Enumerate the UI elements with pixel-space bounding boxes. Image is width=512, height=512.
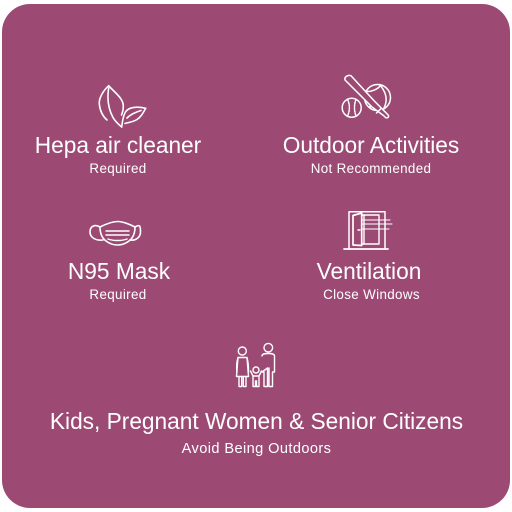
text: Not Recommended: Not Recommended: [311, 161, 431, 176]
heading: Ventilation: Ventilation: [317, 258, 421, 284]
icon: face mask: [90, 222, 140, 245]
heading: Hepa air cleaner: Hepa air cleaner: [35, 132, 202, 158]
icon: bat and balls: [342, 75, 390, 118]
heading: N95 Mask: N95 Mask: [68, 258, 171, 284]
icon: open window: [344, 212, 392, 249]
icon: leaves: [99, 86, 146, 127]
icon: family: [236, 343, 274, 386]
text: Close Windows: Close Windows: [323, 287, 420, 302]
heading: Kids, Pregnant Women & Senior Citizens: Kids, Pregnant Women & Senior Citizens: [50, 408, 463, 434]
text: Required: Required: [89, 287, 147, 302]
heading: Outdoor Activities: Outdoor Activities: [283, 132, 459, 158]
text: Avoid Being Outdoors: Avoid Being Outdoors: [182, 441, 331, 457]
text: Required: Required: [89, 161, 147, 176]
